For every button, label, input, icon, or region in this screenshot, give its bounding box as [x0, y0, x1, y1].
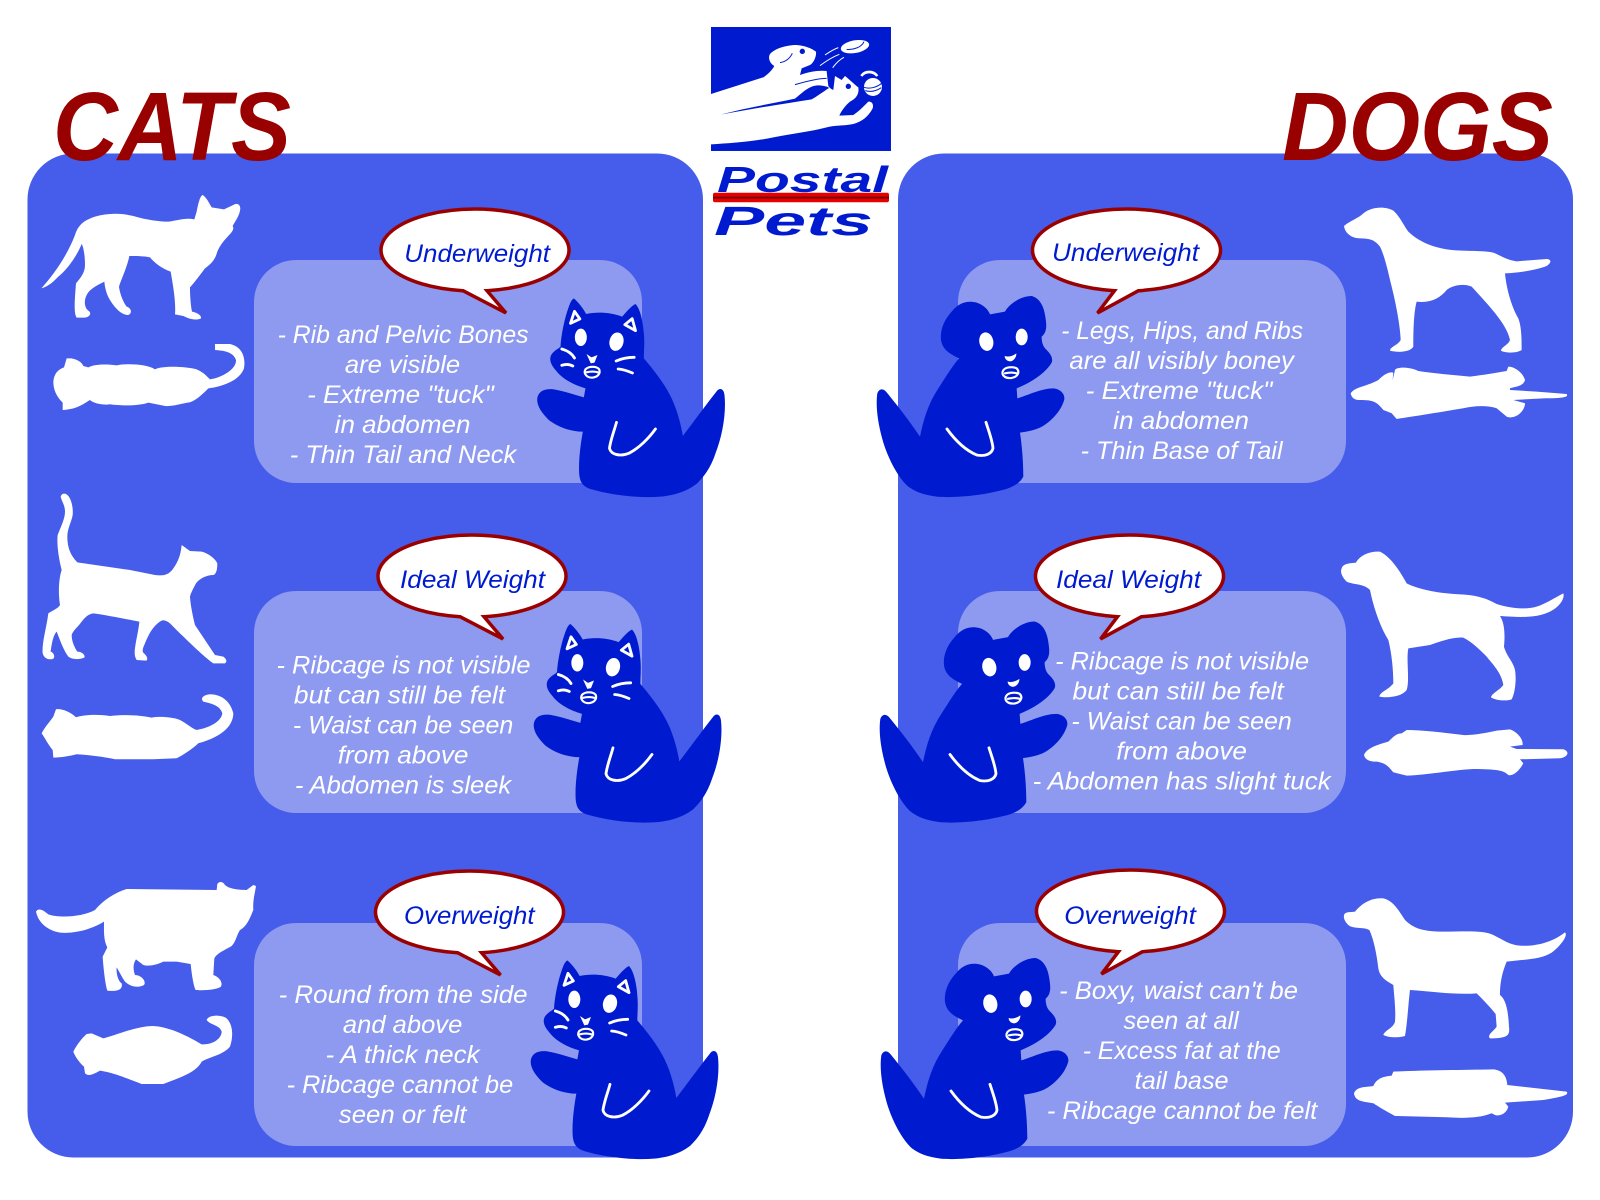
icon: ideal dog top silhouette [1364, 729, 1567, 776]
text: cat underweight signs [278, 321, 529, 469]
heading: DOGS: DOGS [1282, 72, 1553, 181]
divider: red double line [713, 193, 889, 202]
text: cat underweight signs: - Extreme "tuck" [307, 381, 495, 409]
text: cat underweight signs: are visible [345, 351, 460, 379]
text: dog ideal weight signs [1033, 648, 1332, 796]
panel: cats [28, 72, 725, 1159]
panel: dog overweight [881, 870, 1567, 1159]
icon: underweight cat side silhouette [41, 195, 240, 319]
text: dog overweight signs: - Excess fat at the [1083, 1037, 1281, 1065]
text: dog overweight signs: - Boxy, waist can't be [1059, 977, 1298, 1005]
icon: cat mascot [531, 960, 718, 1159]
text: dog ideal weight signs: - Ribcage is not visible [1055, 648, 1309, 676]
icon: overweight cat side silhouette [36, 882, 256, 991]
panel: dogs [877, 72, 1573, 1159]
text: dog ideal weight signs: but can still be felt [1072, 678, 1285, 706]
callout: Underweight [1032, 209, 1220, 313]
text: dog overweight signs: tail base [1135, 1067, 1229, 1095]
callout: Ideal Weight [378, 535, 566, 639]
icon: overweight cat top silhouette [73, 1016, 232, 1084]
text: cat underweight signs: - Thin Tail and Neck [290, 441, 518, 469]
icon: ideal cat top silhouette [42, 694, 233, 759]
text: dog underweight signs: are all visibly boney [1069, 347, 1295, 375]
panel: dog ideal weight [880, 535, 1567, 823]
panel: cat ideal weight [42, 494, 721, 823]
icon: overweight dog side silhouette [1344, 898, 1566, 1038]
icon: cat mascot [534, 624, 721, 823]
callout: Overweight [1036, 870, 1224, 974]
text: cat ideal weight signs: - Ribcage is not visible [276, 652, 530, 680]
icon: underweight dog side silhouette [1344, 208, 1550, 353]
text: cat overweight signs: - Round from the side [279, 981, 528, 1009]
icon: underweight dog top silhouette [1351, 367, 1567, 419]
icon: dog mascot [881, 958, 1068, 1159]
text: dog ideal weight signs: - Waist can be seen [1071, 708, 1292, 736]
icon: ideal dog side silhouette [1341, 552, 1564, 700]
icon: dog mascot [880, 621, 1067, 823]
callout: Underweight: Underweight [404, 240, 551, 268]
text: cat overweight signs: seen or felt [339, 1101, 467, 1129]
panel: cat underweight [41, 195, 725, 497]
text: cat overweight signs: - Ribcage cannot be [287, 1071, 513, 1099]
text: cat underweight signs: - Rib and Pelvic Bones [278, 321, 529, 349]
icon: logo dog and cat playing [711, 27, 891, 151]
text: cat overweight signs: and above [343, 1011, 462, 1039]
text: dog underweight signs: in abdomen [1113, 407, 1249, 435]
text: cat overweight signs: - A thick neck [326, 1041, 481, 1069]
text: dog underweight signs: - Thin Base of Tail [1081, 437, 1284, 465]
heading: CATS: CATS [53, 72, 291, 181]
text: cat ideal weight signs: but can still be felt [294, 682, 506, 710]
panel: cat overweight [36, 871, 718, 1159]
text: cat underweight signs: in abdomen [335, 411, 470, 439]
icon: ideal cat side silhouette [43, 494, 226, 663]
text: cat ideal weight signs [276, 652, 530, 800]
logo: Postal Pets [711, 27, 891, 244]
callout: Ideal Weight: Ideal Weight [1056, 566, 1202, 594]
text: dog overweight signs: - Ribcage cannot be felt [1047, 1097, 1318, 1125]
text: dog ideal weight signs: - Abdomen has slight tuck [1033, 768, 1332, 796]
text: dog overweight signs [1047, 977, 1318, 1125]
text: Postal: Postal [717, 159, 890, 200]
text: dog underweight signs: - Legs, Hips, and Ribs [1061, 317, 1303, 345]
icon: overweight dog top silhouette [1354, 1069, 1567, 1118]
callout: Underweight: Underweight [1052, 239, 1200, 267]
callout: Overweight: Overweight [1064, 902, 1197, 930]
text: cat ideal weight signs: - Waist can be seen [293, 712, 513, 740]
text: dog overweight signs: seen at all [1124, 1007, 1240, 1035]
icon: dog mascot [877, 296, 1064, 497]
callout: Ideal Weight: Ideal Weight [400, 566, 546, 594]
panel: dog underweight [877, 208, 1567, 497]
icon: underweight cat top silhouette [53, 344, 244, 410]
callout: Overweight [376, 871, 564, 975]
text: cat overweight signs [279, 981, 528, 1129]
callout: Underweight [381, 209, 569, 313]
text: cat ideal weight signs: - Abdomen is sleek [295, 772, 513, 800]
callout: Overweight: Overweight [404, 902, 536, 930]
text: dog underweight signs [1061, 317, 1303, 465]
text: dog ideal weight signs: from above [1116, 738, 1247, 766]
icon: cat mascot [537, 298, 725, 497]
text: cat ideal weight signs: from above [338, 742, 468, 770]
text: dog underweight signs: - Extreme "tuck" [1086, 377, 1274, 405]
text: Pets: Pets [714, 198, 873, 244]
callout: Ideal Weight [1036, 535, 1224, 639]
